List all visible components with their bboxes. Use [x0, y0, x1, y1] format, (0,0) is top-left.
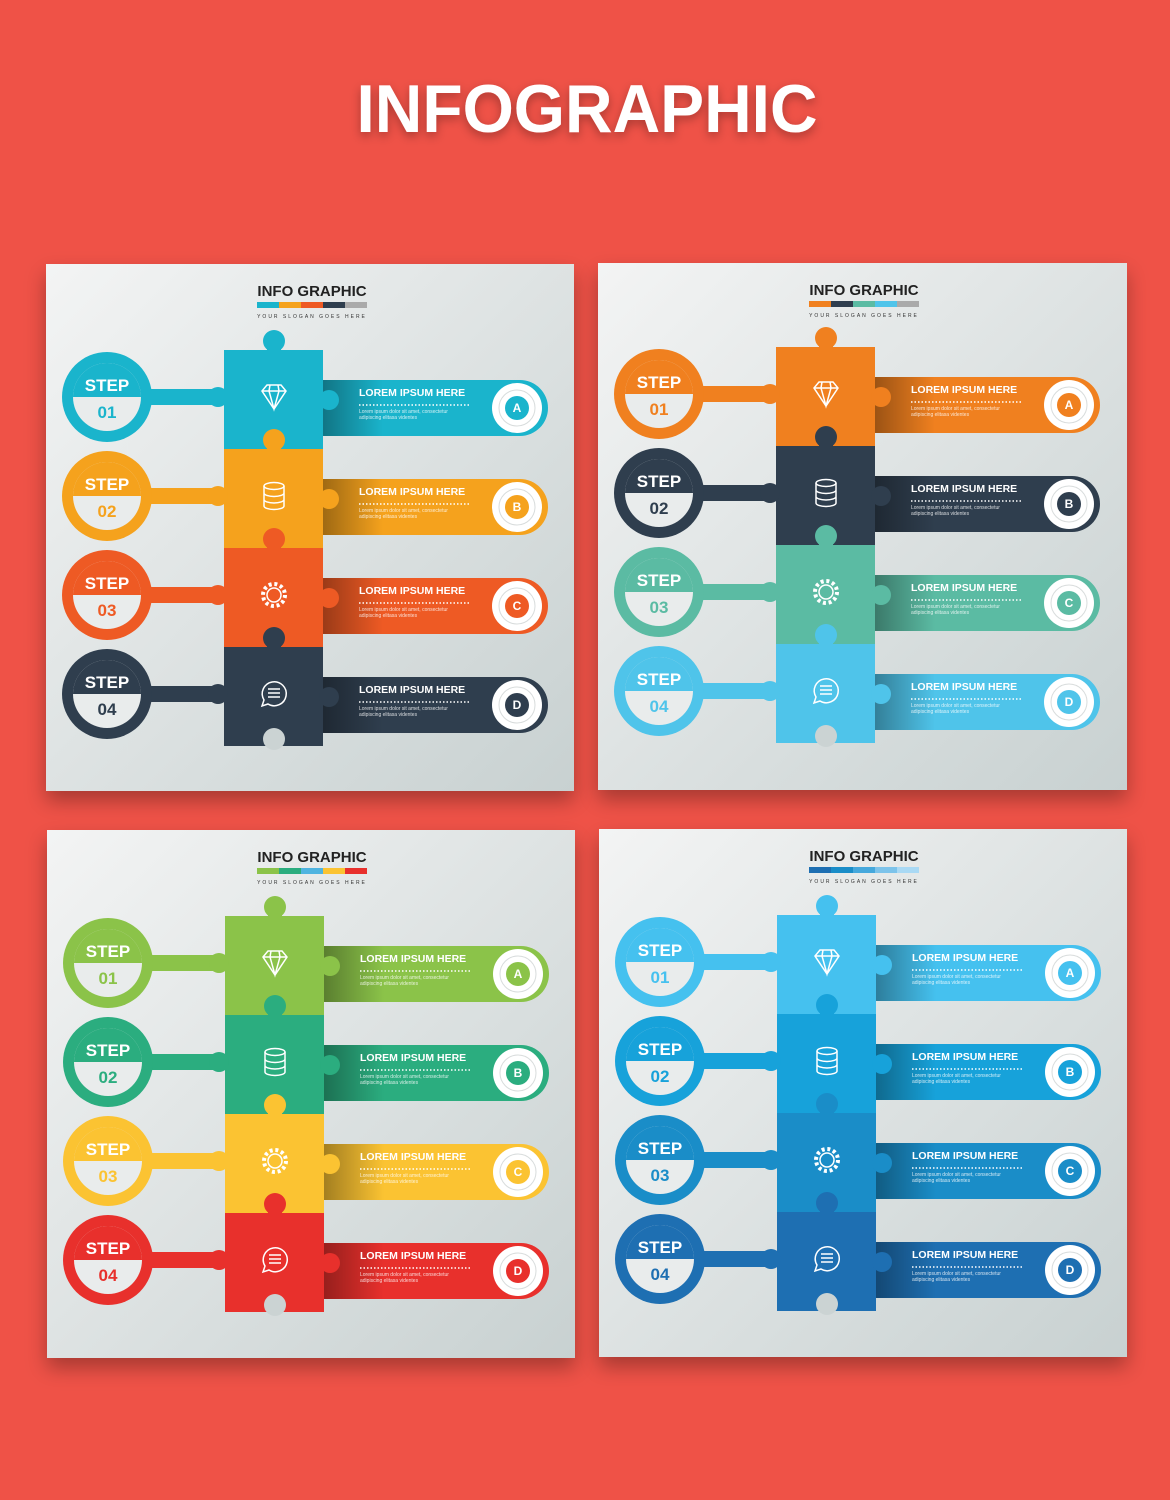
panel header: YOUR SLOGAN GOES HERE	[257, 314, 367, 320]
row 1: LOREM IPSUM HERE	[360, 953, 466, 965]
panel: top-left	[46, 264, 574, 791]
row 4: adipiscing elitasa videntes	[360, 1278, 419, 1284]
row 4: STEP	[637, 670, 681, 689]
row 3: LOREM IPSUM HERE	[360, 1151, 466, 1163]
row 4	[615, 1192, 1101, 1315]
row 1: LOREM IPSUM HERE	[912, 952, 1018, 964]
row 1: Lorem ipsum dolor sit amet, consectetur	[911, 406, 1000, 412]
row 3: STEP	[86, 1140, 130, 1159]
row 3	[62, 528, 548, 647]
panel: top-right	[598, 263, 1127, 790]
row 3: C	[514, 1165, 523, 1179]
row 4: STEP	[638, 1238, 682, 1257]
row 2: LOREM IPSUM HERE	[360, 1052, 466, 1064]
panel header: INFO GRAPHIC	[809, 282, 919, 299]
row 4: 04	[98, 700, 117, 719]
row 2: STEP	[637, 472, 681, 491]
row 4: STEP	[85, 673, 129, 692]
row 4	[614, 624, 1100, 747]
row 3: 03	[650, 598, 668, 617]
row 3: STEP	[637, 571, 681, 590]
panel header: YOUR SLOGAN GOES HERE	[809, 313, 919, 319]
row 3	[63, 1094, 549, 1213]
row 4: Lorem ipsum dolor sit amet, consectetur	[912, 1271, 1001, 1277]
row 2: 02	[650, 499, 668, 518]
row 1: STEP	[638, 941, 682, 960]
panel header	[809, 848, 919, 885]
row 3: 03	[98, 601, 116, 620]
panel header	[809, 282, 919, 319]
row 1: adipiscing elitasa videntes	[911, 412, 970, 418]
row 2: adipiscing elitasa videntes	[911, 511, 970, 517]
row 3	[615, 1093, 1101, 1212]
row 4: Lorem ipsum dolor sit amet, consectetur	[359, 706, 448, 712]
row 2: B	[514, 1066, 523, 1080]
row 3: adipiscing elitasa videntes	[359, 613, 418, 619]
row 3: C	[1066, 1164, 1075, 1178]
row 4	[63, 1193, 549, 1316]
panel header: INFO GRAPHIC	[809, 848, 919, 865]
row 4: D	[1065, 695, 1074, 709]
row 3: Lorem ipsum dolor sit amet, consectetur	[912, 1172, 1001, 1178]
row 2	[614, 426, 1100, 545]
row 1: Lorem ipsum dolor sit amet, consectetur	[359, 409, 448, 415]
row 1: 01	[651, 968, 669, 987]
row 1	[62, 330, 548, 449]
row 4: Lorem ipsum dolor sit amet, consectetur	[360, 1272, 449, 1278]
row 4: LOREM IPSUM HERE	[360, 1250, 466, 1262]
row 4: LOREM IPSUM HERE	[911, 681, 1017, 693]
row 2: adipiscing elitasa videntes	[912, 1079, 971, 1085]
row 2: 02	[99, 1068, 117, 1087]
row 3: Lorem ipsum dolor sit amet, consectetur	[359, 607, 448, 613]
row 2	[615, 994, 1101, 1113]
row 2	[63, 995, 549, 1114]
row 3: Lorem ipsum dolor sit amet, consectetur	[911, 604, 1000, 610]
row 4: 04	[650, 697, 669, 716]
row 4: 04	[651, 1265, 670, 1284]
row 2: LOREM IPSUM HERE	[912, 1051, 1018, 1063]
row 1: adipiscing elitasa videntes	[359, 415, 418, 421]
row 4: LOREM IPSUM HERE	[359, 684, 465, 696]
panel header: YOUR SLOGAN GOES HERE	[809, 879, 919, 885]
row 1: LOREM IPSUM HERE	[911, 384, 1017, 396]
panel header	[257, 283, 367, 320]
row 1: Lorem ipsum dolor sit amet, consectetur	[360, 975, 449, 981]
row 2: LOREM IPSUM HERE	[911, 483, 1017, 495]
panel header	[257, 849, 367, 886]
row 3: adipiscing elitasa videntes	[360, 1179, 419, 1185]
row 1	[615, 895, 1101, 1014]
row 2: B	[513, 500, 522, 514]
row 2: B	[1066, 1065, 1075, 1079]
row 3: 03	[99, 1167, 117, 1186]
row 2: Lorem ipsum dolor sit amet, consectetur	[360, 1074, 449, 1080]
panel header: INFO GRAPHIC	[257, 849, 367, 866]
row 3: LOREM IPSUM HERE	[359, 585, 465, 597]
row 3: 03	[651, 1166, 669, 1185]
row 4: Lorem ipsum dolor sit amet, consectetur	[911, 703, 1000, 709]
row 1: STEP	[85, 376, 129, 395]
row 1: adipiscing elitasa videntes	[360, 981, 419, 987]
row 1: adipiscing elitasa videntes	[912, 980, 971, 986]
row 3: adipiscing elitasa videntes	[912, 1178, 971, 1184]
row 2: 02	[651, 1067, 669, 1086]
row 3: adipiscing elitasa videntes	[911, 610, 970, 616]
panel header: YOUR SLOGAN GOES HERE	[257, 880, 367, 886]
panel header: INFO GRAPHIC	[257, 283, 367, 300]
row 2: LOREM IPSUM HERE	[359, 486, 465, 498]
row 1: 01	[98, 403, 116, 422]
row 1: LOREM IPSUM HERE	[359, 387, 465, 399]
row 4: D	[514, 1264, 523, 1278]
row 2: STEP	[86, 1041, 130, 1060]
row 3: STEP	[638, 1139, 682, 1158]
row 2: adipiscing elitasa videntes	[359, 514, 418, 520]
row 3: C	[513, 599, 522, 613]
row 2: B	[1065, 497, 1074, 511]
row 2: STEP	[638, 1040, 682, 1059]
row 3: C	[1065, 596, 1074, 610]
row 1: STEP	[637, 373, 681, 392]
row 4: STEP	[86, 1239, 130, 1258]
row 2: 02	[98, 502, 116, 521]
row 1: 01	[99, 969, 117, 988]
row 2: STEP	[85, 475, 129, 494]
row 3: STEP	[85, 574, 129, 593]
row 1	[614, 327, 1100, 446]
row 3: Lorem ipsum dolor sit amet, consectetur	[360, 1173, 449, 1179]
row 3: LOREM IPSUM HERE	[911, 582, 1017, 594]
row 3	[614, 525, 1100, 644]
row 1: STEP	[86, 942, 130, 961]
row 1	[63, 896, 549, 1015]
panel: bottom-left	[47, 830, 575, 1358]
row 2: adipiscing elitasa videntes	[360, 1080, 419, 1086]
row 4: D	[1066, 1263, 1075, 1277]
row 2: Lorem ipsum dolor sit amet, consectetur	[911, 505, 1000, 511]
row 4: adipiscing elitasa videntes	[912, 1277, 971, 1283]
row 1: 01	[650, 400, 668, 419]
row 1: Lorem ipsum dolor sit amet, consectetur	[912, 974, 1001, 980]
row 2: Lorem ipsum dolor sit amet, consectetur	[912, 1073, 1001, 1079]
row 1: A	[513, 401, 522, 415]
row 4: LOREM IPSUM HERE	[912, 1249, 1018, 1261]
row 2: Lorem ipsum dolor sit amet, consectetur	[359, 508, 448, 514]
row 3: LOREM IPSUM HERE	[912, 1150, 1018, 1162]
row 4: adipiscing elitasa videntes	[911, 709, 970, 715]
row 2	[62, 429, 548, 548]
row 1: A	[514, 967, 523, 981]
title: INFOGRAPHIC	[356, 71, 818, 147]
row 1: A	[1066, 966, 1075, 980]
row 4: adipiscing elitasa videntes	[359, 712, 418, 718]
row 4: D	[513, 698, 522, 712]
row 4: 04	[99, 1266, 118, 1285]
row 4	[62, 627, 548, 750]
panel: bottom-right	[599, 829, 1127, 1357]
row 1: A	[1065, 398, 1074, 412]
